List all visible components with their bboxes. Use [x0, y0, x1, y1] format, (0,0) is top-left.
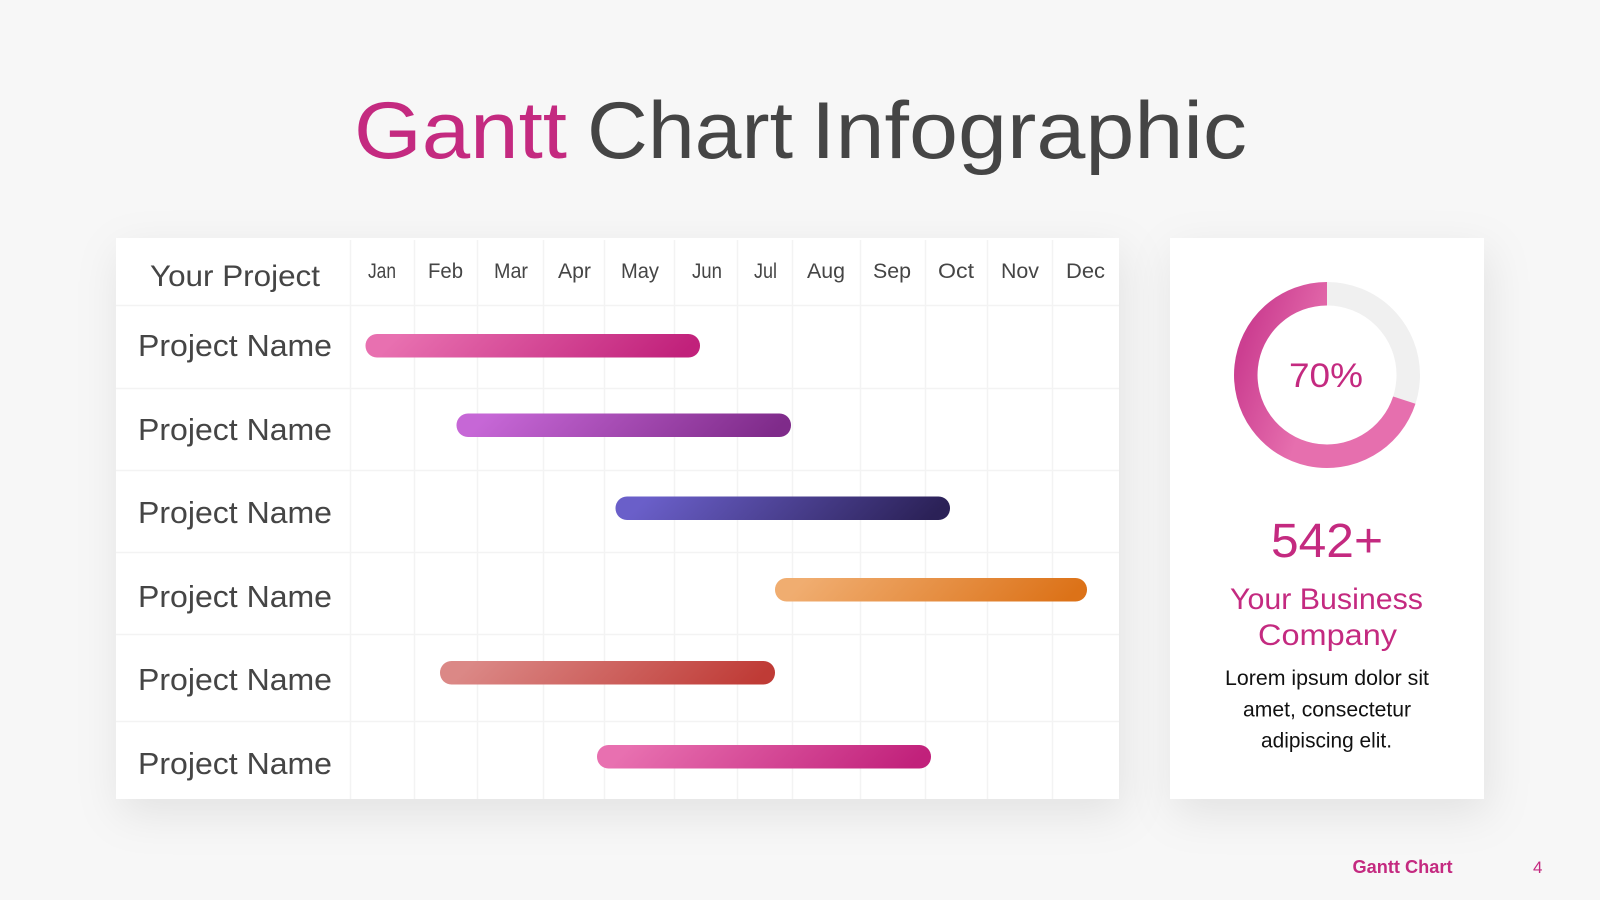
bar: project 5: [440, 661, 775, 684]
month labels: Jun: [692, 260, 722, 283]
row labels: Project Name: [138, 746, 332, 781]
footer label: Gantt Chart: [1352, 856, 1452, 877]
company heading: Company: [1258, 619, 1397, 652]
big number: 542+: [1271, 515, 1383, 568]
row labels: Project Name: [138, 412, 332, 447]
month labels: Oct: [938, 260, 974, 283]
month labels: Mar: [494, 260, 528, 283]
bar: project 4: [775, 578, 1087, 602]
panel: gantt chart: [116, 238, 1119, 799]
month labels: May: [621, 260, 659, 283]
row labels: Project Name: [138, 328, 332, 363]
description: amet, consectetur: [1243, 698, 1411, 722]
row labels: Project Name: [138, 579, 332, 614]
bar: project 3: [616, 496, 950, 520]
description: Lorem ipsum dolor sit: [1225, 667, 1429, 690]
company heading: [1230, 583, 1423, 652]
page number: 4: [1533, 858, 1542, 877]
bar: project 6: [597, 745, 931, 768]
bar: project 1: [366, 334, 700, 358]
month labels: Jan: [368, 260, 396, 283]
month labels: Dec: [1066, 260, 1105, 283]
bar: project 2: [456, 414, 791, 437]
title: Gantt: [354, 86, 567, 176]
description: [1225, 667, 1429, 752]
header: your project: Your Project: [150, 260, 321, 293]
month labels: Nov: [1001, 260, 1039, 283]
donut chart 70%: [1246, 294, 1408, 456]
description: adipiscing elit.: [1261, 730, 1392, 752]
month labels: Feb: [428, 260, 463, 283]
month labels: Jul: [754, 260, 777, 283]
row labels: [138, 328, 332, 781]
company heading: Your Business: [1230, 583, 1423, 616]
month labels: Aug: [807, 260, 845, 283]
panel: summary: [1170, 238, 1484, 799]
row labels: Project Name: [138, 495, 332, 530]
month labels: Sep: [873, 260, 911, 283]
title: Infographic: [811, 86, 1247, 176]
title: [354, 86, 1247, 176]
month labels: [368, 260, 1105, 283]
month labels: Apr: [558, 260, 591, 283]
title: Chart: [587, 86, 793, 176]
row labels: Project Name: [138, 662, 332, 697]
donut value: 70%: [1289, 357, 1363, 395]
